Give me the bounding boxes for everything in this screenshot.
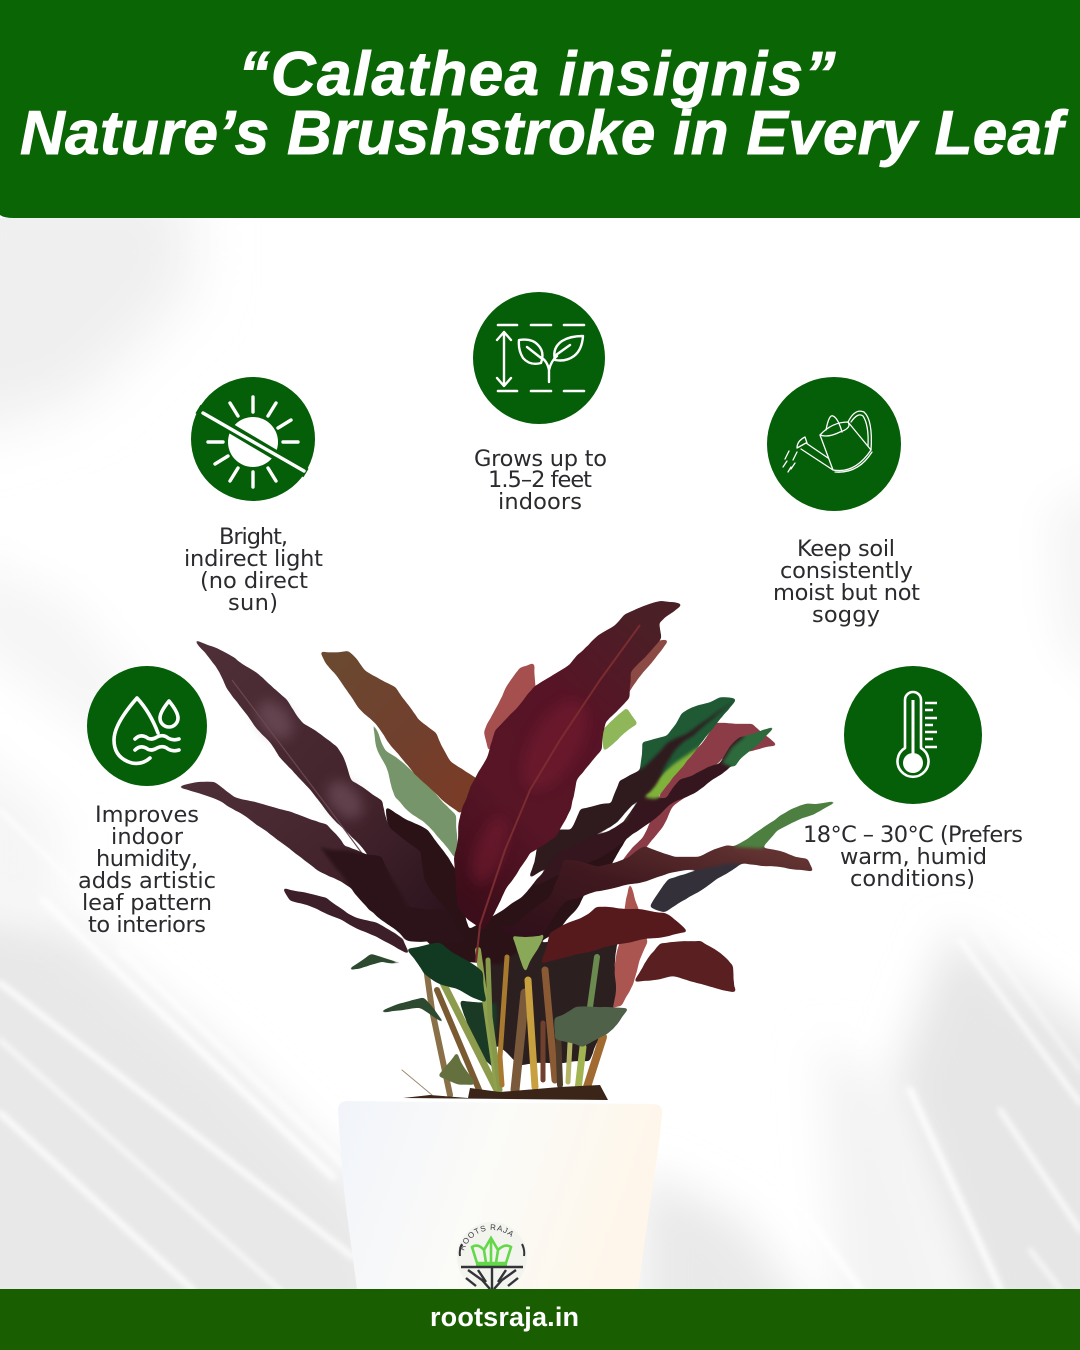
text: light: sun) — [228, 590, 278, 616]
background — [0, 218, 1080, 1289]
text: watering — [773, 536, 920, 628]
text: humidity — [78, 802, 216, 938]
text: humidity: to interiors — [88, 912, 206, 938]
footer website: rootsraja.in — [430, 1302, 579, 1332]
text: light — [184, 524, 323, 616]
text: humidity: Improves — [95, 802, 199, 828]
dark inner foliage — [386, 806, 640, 1075]
text: humidity: adds artistic — [78, 868, 216, 894]
logo roots — [461, 1267, 523, 1289]
logo crown — [472, 1238, 511, 1263]
feature: humidity — [78, 666, 216, 938]
pot — [338, 1101, 662, 1289]
stems — [402, 950, 603, 1095]
leaf: dark green lower leaves — [348, 934, 545, 1084]
header banner — [0, 0, 1080, 218]
leaf highlights: central — [465, 690, 601, 888]
leaf: central burgundy — [454, 601, 681, 932]
feature: watering — [767, 377, 920, 628]
soil — [403, 1085, 608, 1100]
footer bar — [0, 1289, 1080, 1350]
text: temperature: conditions) — [850, 866, 975, 892]
text: humidity: humidity, — [96, 846, 198, 872]
icon: watering can — [767, 377, 901, 511]
text: temperature: 18°C – 30°C (Prefers — [803, 822, 1023, 848]
text: temperature: warm, humid — [840, 844, 987, 870]
icon: no direct sun — [191, 377, 315, 501]
text: height: 1.5–2 feet — [488, 467, 592, 493]
text: light: indirect light — [184, 546, 323, 572]
leaf: lower left — [178, 782, 466, 954]
title: “Calathea insignis” — [238, 40, 836, 109]
text: light: (no direct — [200, 568, 308, 594]
title — [20, 40, 1068, 168]
leaf: right green tipped — [529, 698, 778, 887]
text: light: Bright, — [219, 524, 288, 550]
icon: thermometer — [844, 666, 982, 804]
plant — [178, 601, 838, 1100]
text: humidity: indoor — [111, 824, 184, 850]
feature: height — [473, 292, 607, 515]
text: watering: consistently — [780, 558, 913, 584]
leaf: large left — [193, 640, 464, 945]
leaf highlights: left — [250, 694, 370, 826]
leaf: brown upper — [321, 652, 477, 815]
title: Nature’s Brushstroke in Every Leaf — [20, 99, 1068, 168]
text: height — [474, 446, 607, 515]
text: height: Grows up to — [474, 446, 607, 472]
icon: plant height — [473, 292, 605, 424]
feature: temperature — [803, 666, 1023, 892]
icon: water drops — [87, 666, 207, 786]
text: watering: soggy — [812, 602, 880, 628]
logo name: ROOTS RAJA — [459, 1224, 513, 1250]
text: humidity: leaf pattern — [82, 890, 212, 916]
feature: light — [184, 377, 323, 616]
text: watering: moist but not — [773, 580, 920, 606]
text: watering: Keep soil — [797, 536, 895, 562]
text: height: indoors — [498, 489, 582, 515]
leaf: far right — [496, 802, 838, 935]
text: temperature — [803, 822, 1023, 892]
leaf: back pink and green leaves — [367, 641, 778, 1010]
leaf: red lower — [541, 907, 737, 1048]
logo: Roots Raja — [457, 1223, 527, 1289]
